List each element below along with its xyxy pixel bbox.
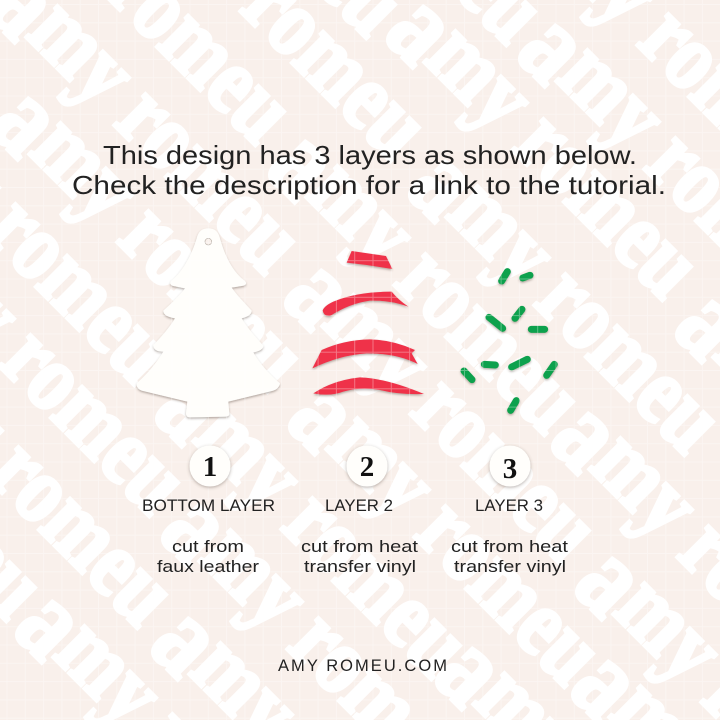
description: faux leather: faux leather — [157, 558, 260, 576]
description: heat transfer vinyl — [301, 538, 419, 576]
watermark pattern: my romeu — [13, 92, 329, 409]
watermark pattern: a — [386, 122, 506, 242]
description: heat transfer vinyl: transfer vinyl — [304, 558, 416, 576]
watermark pattern: my romeu — [310, 387, 626, 704]
number badge 3: 3 — [503, 453, 517, 485]
watermark pattern: a — [129, 579, 249, 699]
description: heat transfer vinyl: cut from heat — [451, 538, 569, 556]
heading — [72, 140, 666, 200]
heading: Check the description for a link to the tutorial. — [72, 170, 666, 200]
watermark pattern: a — [133, 346, 253, 466]
label: layer 3: LAYER 3 — [475, 496, 543, 515]
number badge 1: 1 — [203, 451, 217, 483]
column 3: layer 3 — [451, 446, 569, 576]
label: layer 2: LAYER 2 — [325, 496, 393, 515]
description: heat transfer vinyl: transfer vinyl — [454, 558, 566, 576]
label: bottom layer: BOTTOM LAYER — [142, 496, 275, 515]
illustration: layer 2 red stripes — [312, 251, 424, 395]
watermark pattern: a — [262, 231, 382, 351]
description: faux leather: cut from — [172, 538, 244, 556]
watermark pattern: a — [139, 466, 259, 586]
description: heat transfer vinyl: cut from heat — [301, 538, 419, 556]
watermark pattern: my romeu — [408, 0, 720, 317]
description: heat transfer vinyl — [451, 538, 569, 576]
illustration: layer 3 green sprinkles — [464, 272, 554, 410]
watermark pattern: my romeu — [177, 379, 493, 696]
watermark pattern: a — [553, 519, 673, 639]
illustration: bottom layer tree — [137, 228, 280, 417]
watermark pattern: a — [246, 102, 366, 222]
number badge 2: 2 — [360, 451, 374, 483]
description: faux leather — [157, 538, 260, 576]
watermark pattern: my romeu — [306, 264, 622, 581]
watermark pattern: a — [266, 354, 386, 474]
heading: This design has 3 layers as shown below. — [103, 140, 637, 170]
watermark pattern: a — [529, 374, 649, 494]
watermark pattern: my romeu — [290, 135, 606, 452]
column 1: bottom layer — [142, 446, 275, 576]
column 2: layer 2 — [301, 446, 419, 576]
footer: AMY ROMEU.COM — [278, 657, 447, 675]
